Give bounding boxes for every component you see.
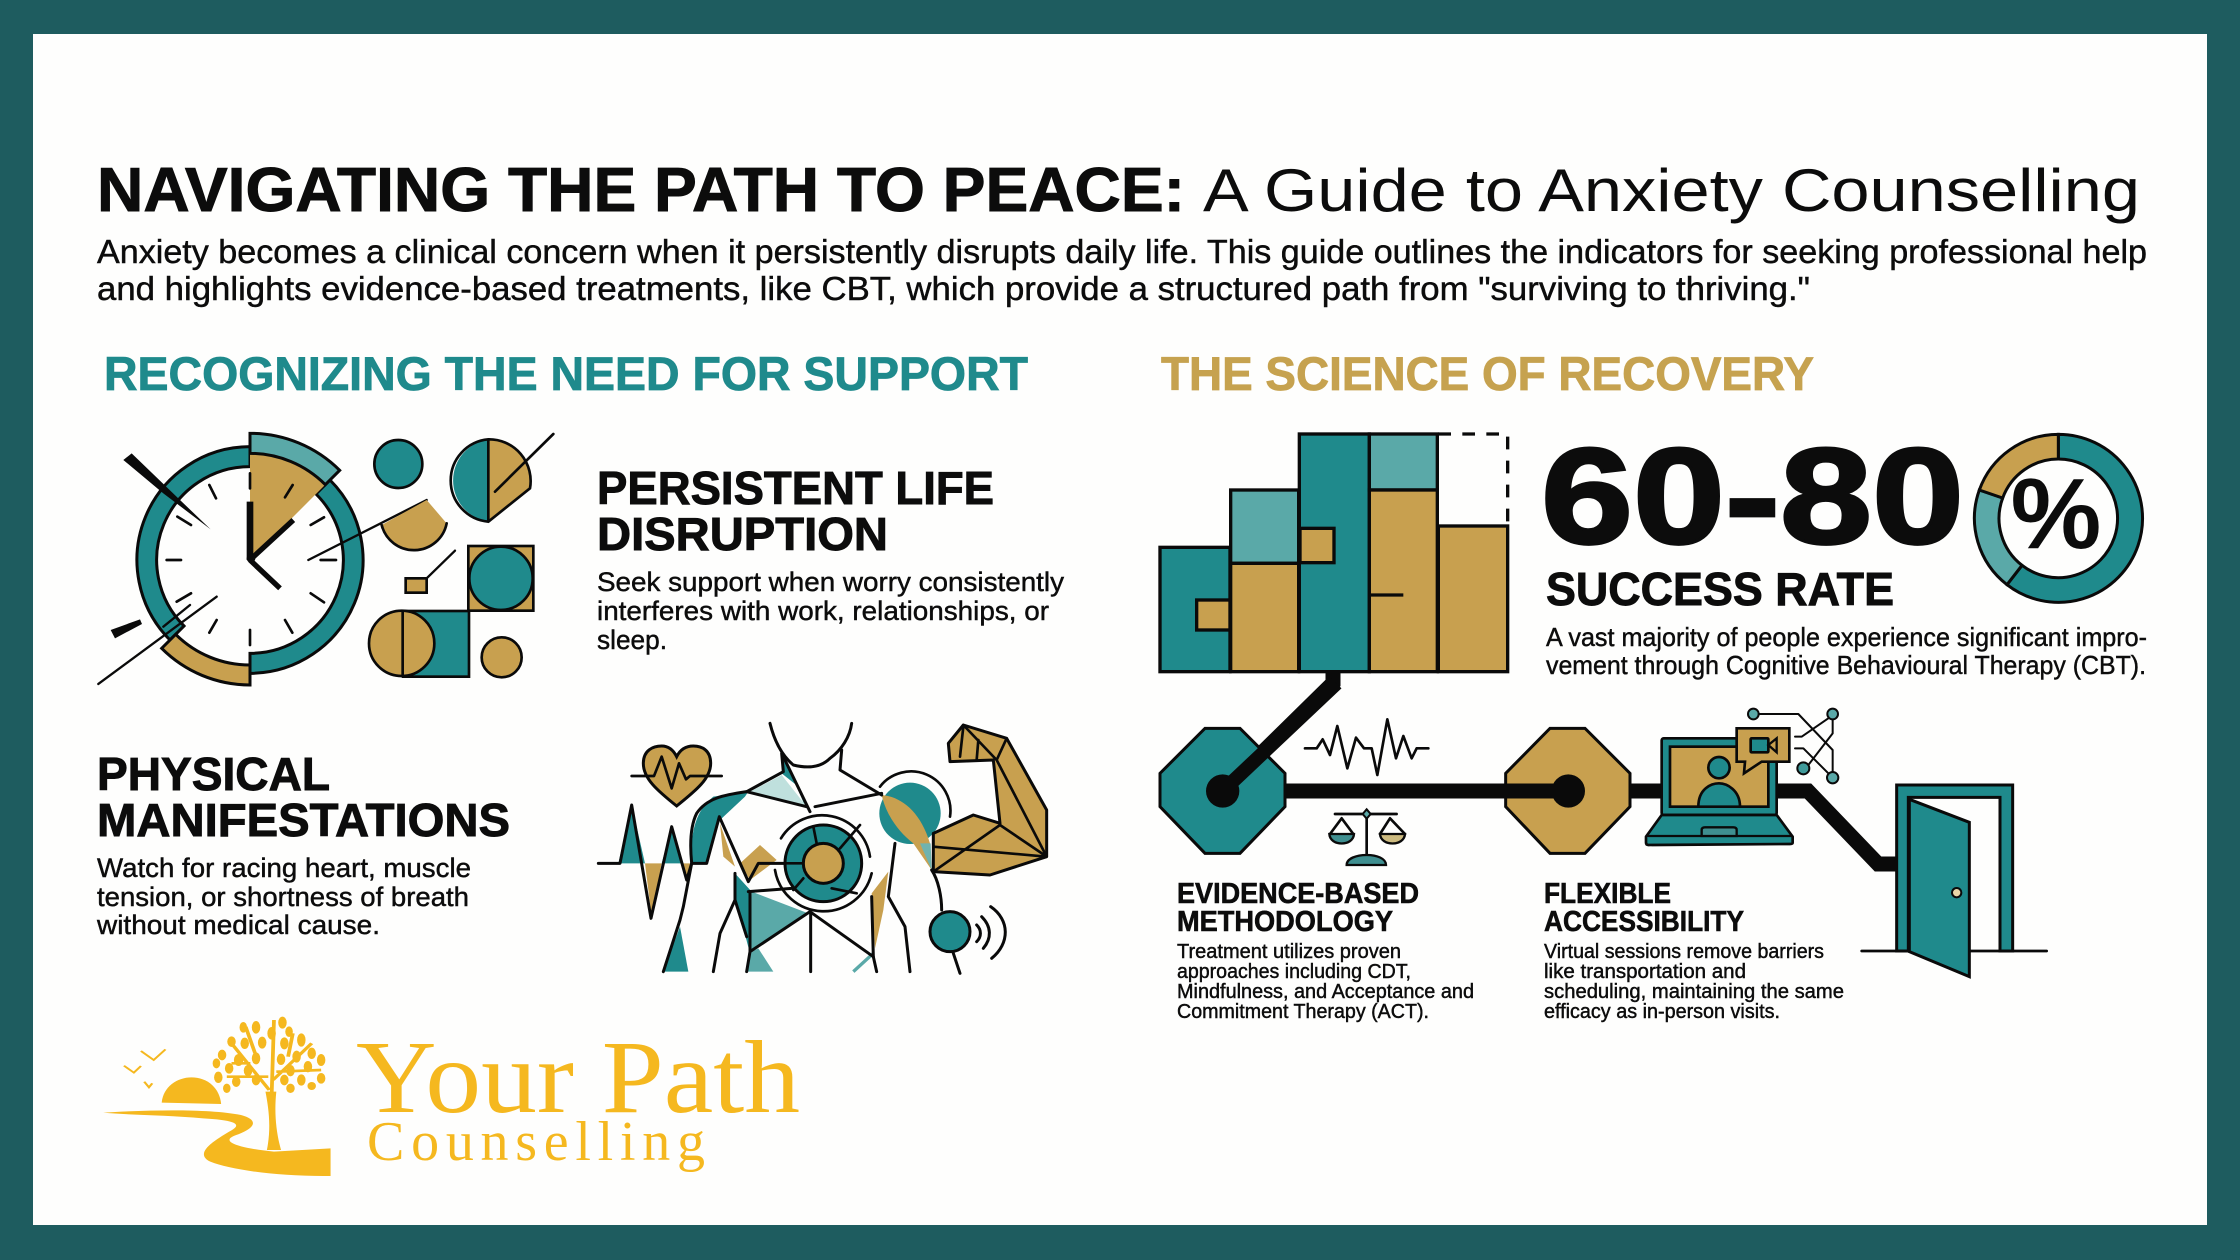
logo: your path counselling (103, 1017, 800, 1176)
icon: open door (1862, 785, 2047, 977)
block: physical manifestations: MANIFESTATIONS (97, 794, 510, 846)
icon: balance scales (1329, 809, 1405, 865)
title (97, 156, 2140, 225)
heading: recognizing the need for support: RECOGNIZING THE NEED FOR SUPPORT (104, 347, 1028, 400)
title: A Guide to Anxiety Counselling (1203, 157, 2140, 224)
chart: stacked bar blocks (1160, 434, 1508, 672)
block: physical manifestations (96, 748, 510, 940)
block: evidence-based methodology: Commitment Therapy (ACT). (1177, 1001, 1429, 1023)
block: physical manifestations: tension, or shortness of breath (97, 882, 469, 912)
block: success rate: A vast majority of people experience significant impro- (1546, 622, 2147, 652)
intro text: Anxiety becomes a clinical concern when it persistently disrupts daily life. This guide outlines the indicators for seeking professional help (97, 233, 2147, 270)
icon: clock and geometric shapes (98, 433, 553, 685)
block: success rate: SUCCESS RATE (1546, 563, 1894, 615)
intro text: and highlights evidence-based treatments, like CBT, which provide a structured path from "surviving to thriving." (97, 270, 1810, 307)
block: success rate (1546, 563, 2147, 680)
icon: percent donut: % (2011, 458, 2101, 570)
block: flexible accessibility: FLEXIBLE (1544, 878, 1671, 910)
icon: percent donut (1974, 434, 2143, 602)
icon: pulse line (1305, 719, 1428, 775)
block: evidence-based methodology: EVIDENCE-BASED (1177, 878, 1419, 910)
block: evidence-based methodology (1177, 878, 1474, 1023)
block: success rate: vement through Cognitive Behavioural Therapy (CBT). (1546, 650, 2146, 680)
block: evidence-based methodology: approaches including CDT, (1177, 961, 1411, 983)
big number: 60-80: 60-80 (1541, 420, 1964, 572)
block: flexible accessibility: like transportation and (1544, 961, 1746, 983)
block: persistent life disruption (597, 462, 1065, 655)
icon: gold node (1506, 728, 1630, 853)
icon: teal node (1160, 683, 1337, 853)
intro text (97, 233, 2147, 307)
block: flexible accessibility: efficacy as in-person visits. (1544, 1001, 1780, 1023)
block: persistent life disruption: DISRUPTION (597, 508, 888, 560)
block: evidence-based methodology: Mindfulness, and Acceptance and (1177, 981, 1474, 1003)
block: persistent life disruption: sleep. (597, 625, 667, 655)
block: persistent life disruption: Seek support when worry consistently (597, 567, 1065, 597)
block: flexible accessibility: Virtual sessions remove barriers (1544, 941, 1824, 963)
logo wordmark: Counselling (367, 1111, 705, 1173)
block: persistent life disruption: interferes with work, relationships, or (597, 596, 1049, 626)
logo wordmark: Your Path (356, 1020, 800, 1135)
block: flexible accessibility: scheduling, maintaining the same (1544, 981, 1844, 1003)
block: evidence-based methodology: Treatment utilizes proven (1177, 941, 1401, 963)
icon: body with heart, pulse and flexed arm (598, 723, 1047, 973)
path connector line (1223, 670, 1897, 864)
logo icon: tree, sun, path and birds (103, 1017, 331, 1176)
block: flexible accessibility: ACCESSIBILITY (1544, 906, 1744, 938)
icon: laptop video call (1646, 709, 1838, 845)
title: NAVIGATING THE PATH TO PEACE: (97, 156, 1185, 225)
heading: the science of recovery: THE SCIENCE OF RECOVERY (1161, 347, 1814, 400)
block: physical manifestations: PHYSICAL (97, 748, 330, 800)
block: persistent life disruption: PERSISTENT LIFE (597, 462, 994, 514)
block: physical manifestations: without medical cause. (96, 910, 380, 940)
block: physical manifestations: Watch for racing heart, muscle (97, 853, 471, 883)
block: evidence-based methodology: METHODOLOGY (1177, 906, 1393, 938)
block: flexible accessibility (1544, 878, 1844, 1023)
